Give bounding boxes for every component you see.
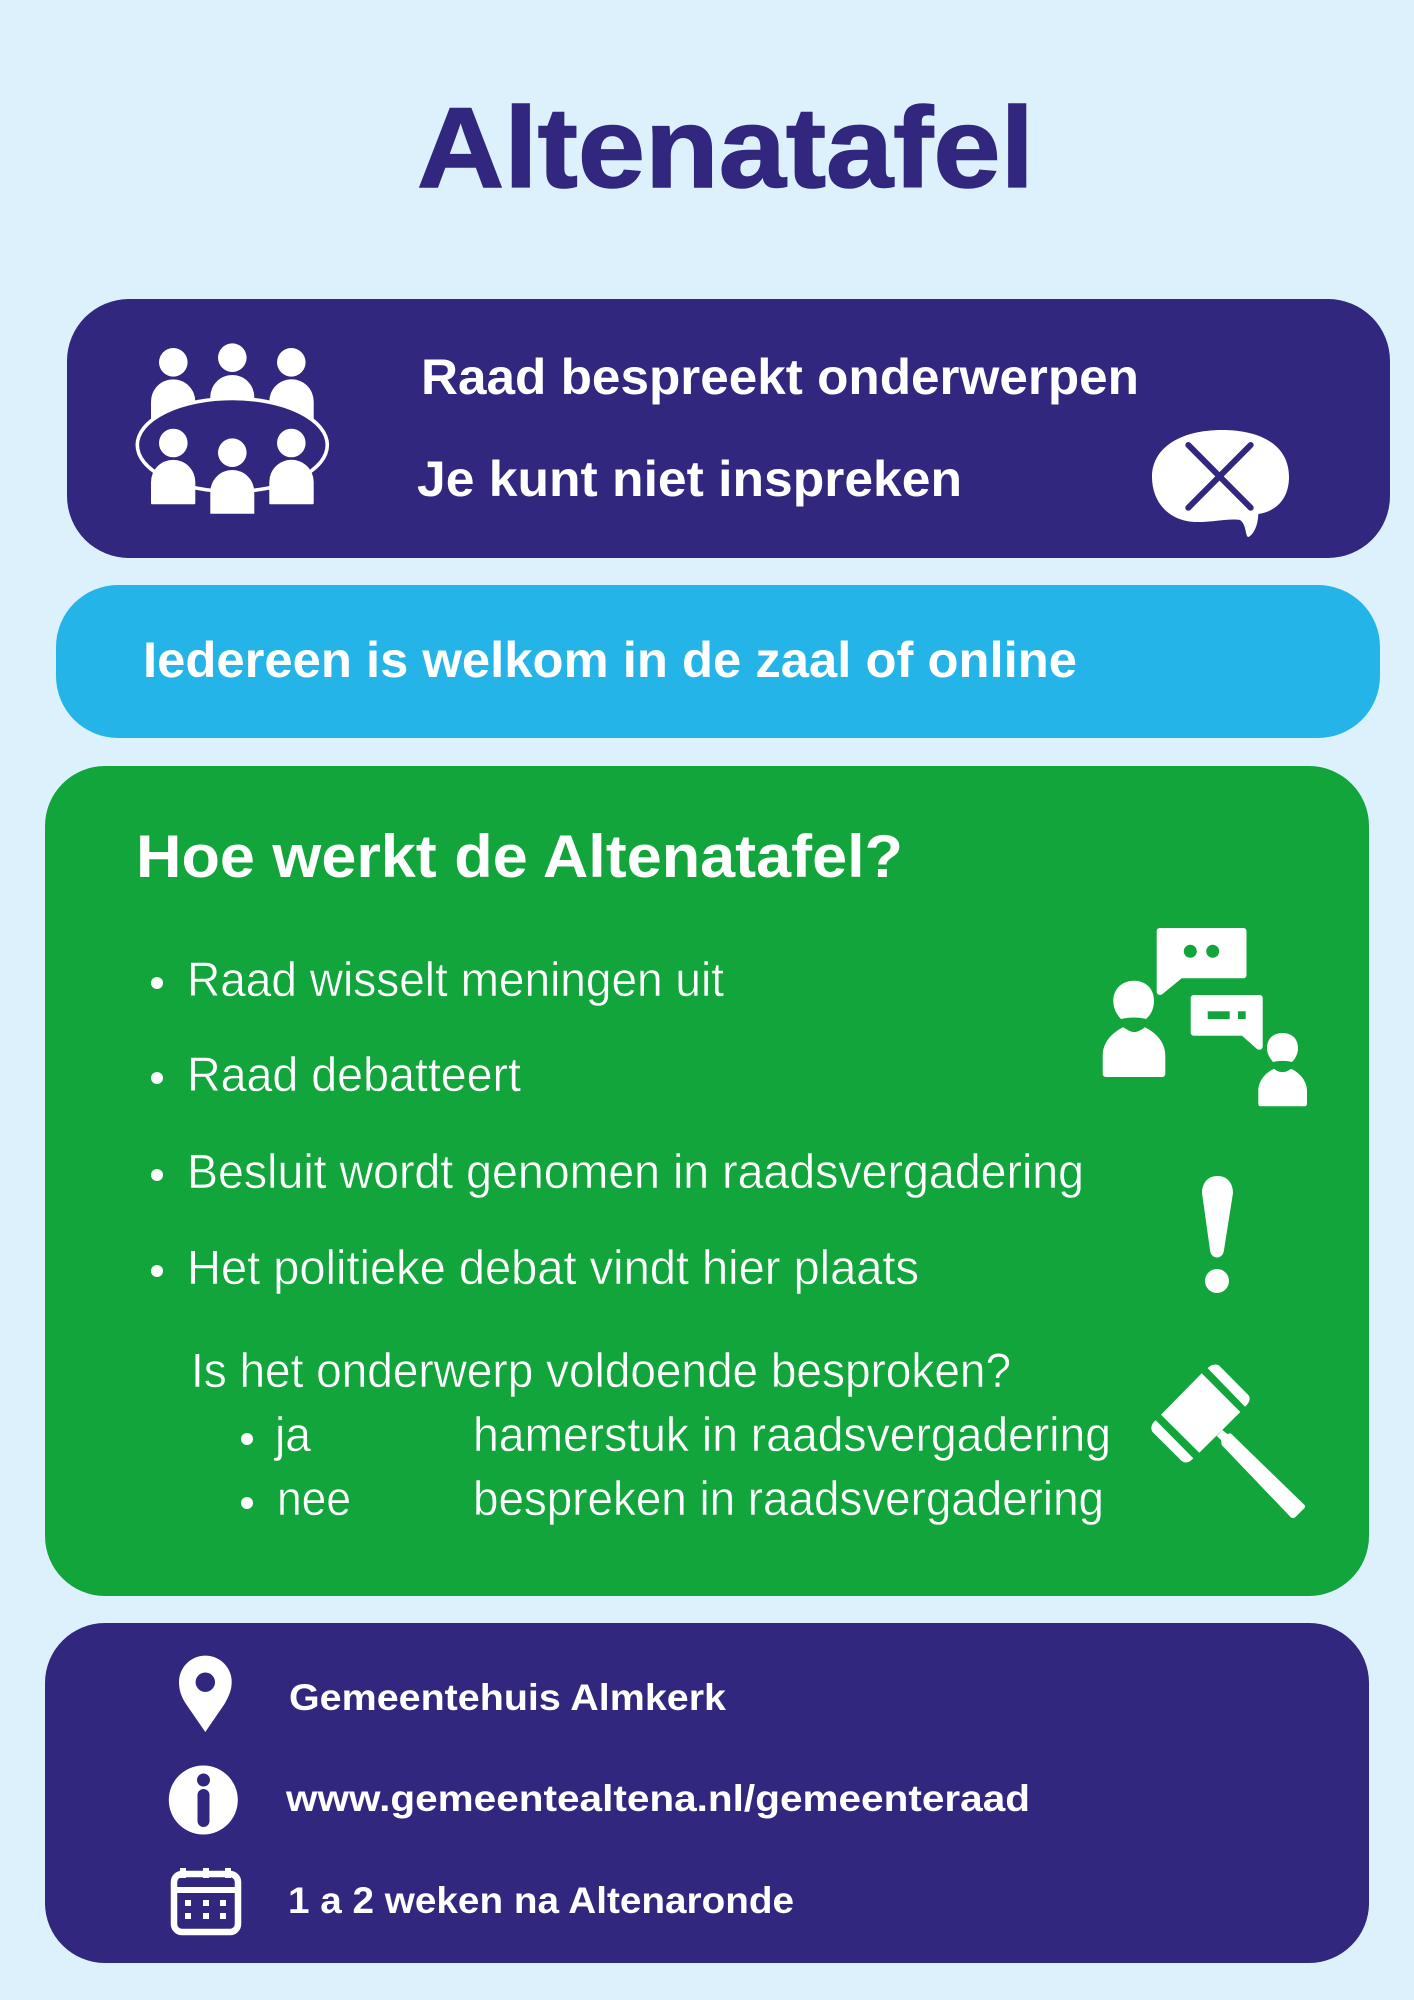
question block: hamerstuk in raadsvergadering — [473, 1409, 1111, 1462]
text: website: www.gemeentealtena.nl/gemeenteraad — [285, 1778, 1030, 1819]
icon: location pin — [179, 1656, 232, 1732]
heading: Hoe werkt de Altenatafel? — [136, 823, 903, 890]
icon: two people talking — [1103, 928, 1307, 1106]
question block: bespreken in raadsvergadering — [473, 1473, 1104, 1526]
bullet list: Raad debatteert — [187, 1049, 521, 1102]
text: raad bespreekt onderwerpen: Raad bespreekt onderwerpen — [421, 349, 1139, 405]
question block: ja — [273, 1409, 311, 1462]
bullet list: Het politieke debat vindt hier plaats — [187, 1242, 919, 1295]
text: iedereen is welkom: Iedereen is welkom in de zaal of online — [143, 632, 1077, 688]
title: Altenatafel — [417, 85, 1034, 212]
panel: practical info — [45, 1623, 1369, 1963]
bullet list: Raad wisselt meningen uit — [187, 954, 724, 1007]
panel: hoe werkt de altenatafel — [45, 766, 1369, 1596]
question block: nee — [277, 1473, 351, 1526]
text: je kunt niet inspreken: Je kunt niet inspreken — [417, 451, 962, 507]
panel: iedereen welkom — [56, 585, 1380, 738]
bullet list: Besluit wordt genomen in raadsvergadering — [187, 1146, 1084, 1199]
icon: speech bubble with cross — [1152, 430, 1289, 537]
bullet list — [151, 954, 1084, 1295]
icon: people around table — [137, 343, 327, 514]
icon: info — [169, 1766, 238, 1834]
question block: Is het onderwerp voldoende besproken? — [191, 1345, 1011, 1398]
icon: gavel — [1151, 1365, 1305, 1518]
panel: raad bespreekt — [67, 299, 1390, 558]
icon: calendar — [174, 1868, 238, 1932]
text: location: Gemeentehuis Almkerk — [289, 1677, 726, 1718]
text: timing: 1 a 2 weken na Altenaronde — [288, 1880, 794, 1921]
icon: exclamation mark — [1202, 1176, 1233, 1293]
question block — [191, 1345, 1111, 1526]
